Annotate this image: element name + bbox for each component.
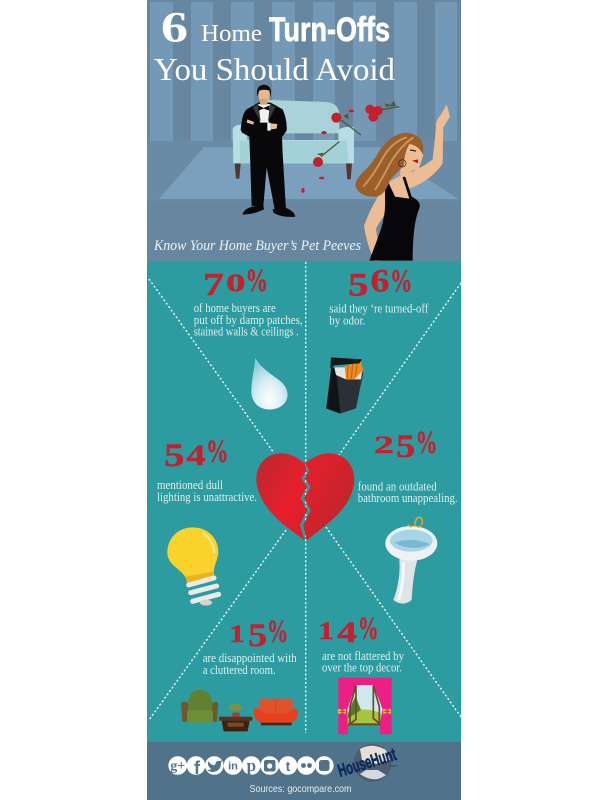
logo: HouseHunt: .com [389, 764, 397, 768]
icon: window with curtains [338, 678, 392, 734]
stat: 15% clutter: % [267, 612, 288, 649]
stat: 56% odor [329, 262, 429, 327]
panel: header scene [147, 0, 461, 261]
stat: 54% lighting: 5 [164, 438, 184, 474]
stat: 25% bathroom: bathroom unappealing. [358, 491, 458, 505]
stat: 70% damp: % [246, 263, 268, 299]
stat: 25% bathroom [358, 425, 458, 505]
title [154, 4, 395, 87]
rug [159, 147, 458, 199]
illustration: woman in black dress [355, 105, 450, 261]
stat: 56% odor: said they ‘re turned-off [329, 302, 429, 316]
stat: 15% clutter: 5 [248, 616, 267, 653]
title: 6 [161, 4, 188, 52]
social icons: g+ [170, 759, 185, 774]
subtitle: Know Your Home Buyer’s Pet Peeves [153, 238, 361, 254]
stat: 56% odor: 5 [348, 267, 368, 303]
social icons: t [286, 758, 291, 774]
logo: HouseHunt: HouseHunt [335, 744, 399, 781]
illustration: man in tuxedo [241, 85, 295, 217]
title: Home [201, 21, 262, 47]
stat: 14% decor: 4 [337, 616, 357, 649]
stat: 14% decor: % [358, 610, 378, 646]
stat: 54% lighting: 4 [186, 439, 205, 472]
social icons: p [247, 756, 256, 775]
icon: light bulb [167, 527, 219, 606]
social icons [168, 756, 334, 778]
armchair [181, 690, 218, 723]
wallpaper stripes [150, 2, 457, 141]
stat: 54% lighting: lighting is unattractive. [157, 490, 257, 504]
dotted dividers [149, 262, 461, 733]
stat: 25% bathroom: 5 [396, 427, 415, 464]
stat: 15% clutter: 1 [229, 620, 245, 648]
stat: 15% clutter: are disappointed with [203, 651, 297, 665]
stat: 15% clutter: a cluttered room. [203, 663, 276, 677]
stat: 70% damp: stained walls & ceilings . [194, 324, 299, 338]
icon: broken heart [256, 453, 354, 540]
icon: water drop [251, 358, 288, 409]
illustration: sofa [233, 100, 354, 179]
panel: footer [147, 742, 461, 800]
stat: 70% damp: put off by damp patches, [194, 313, 303, 327]
stat: 54% lighting: mentioned dull [157, 478, 224, 492]
stat: 70% damp: 7 [203, 267, 224, 303]
icon: furniture set [181, 690, 298, 731]
red sofa [253, 699, 298, 725]
social icons: f [194, 758, 201, 778]
social icons: in [228, 760, 238, 772]
stat: 14% decor: are not flattered by [322, 649, 405, 663]
stat: 70% damp [194, 263, 303, 338]
stat: 25% bathroom: 2 [374, 431, 394, 459]
stat: 25% bathroom: % [416, 425, 437, 461]
title: Turn-Offs [269, 11, 390, 49]
stat: 56% odor: by odor. [329, 313, 365, 327]
stat: 14% decor [318, 610, 405, 675]
stat: 54% lighting [157, 434, 257, 504]
icon: pedestal sink [385, 517, 437, 604]
stat: 14% decor: over the top decor. [322, 661, 402, 675]
stat: 54% lighting: % [206, 434, 228, 470]
logo: HouseHunt [335, 744, 399, 782]
stat: 56% odor: 6 [370, 262, 390, 299]
stat: 15% clutter [203, 612, 297, 677]
panel: statistics [147, 261, 461, 742]
coffee table and plant [219, 704, 252, 731]
stat: 14% decor: 1 [318, 617, 334, 645]
illustration: roses [301, 101, 399, 193]
icon: cigarette pack [326, 357, 363, 414]
stat: 56% odor: % [390, 263, 412, 300]
stat: 25% bathroom: found an outdated [358, 480, 437, 494]
stat: 70% damp: of home buyers are [194, 301, 276, 315]
stat: 70% damp: 0 [226, 270, 245, 297]
title: You Should Avoid [154, 51, 395, 87]
sources: Sources: gocompare.com [250, 783, 352, 795]
